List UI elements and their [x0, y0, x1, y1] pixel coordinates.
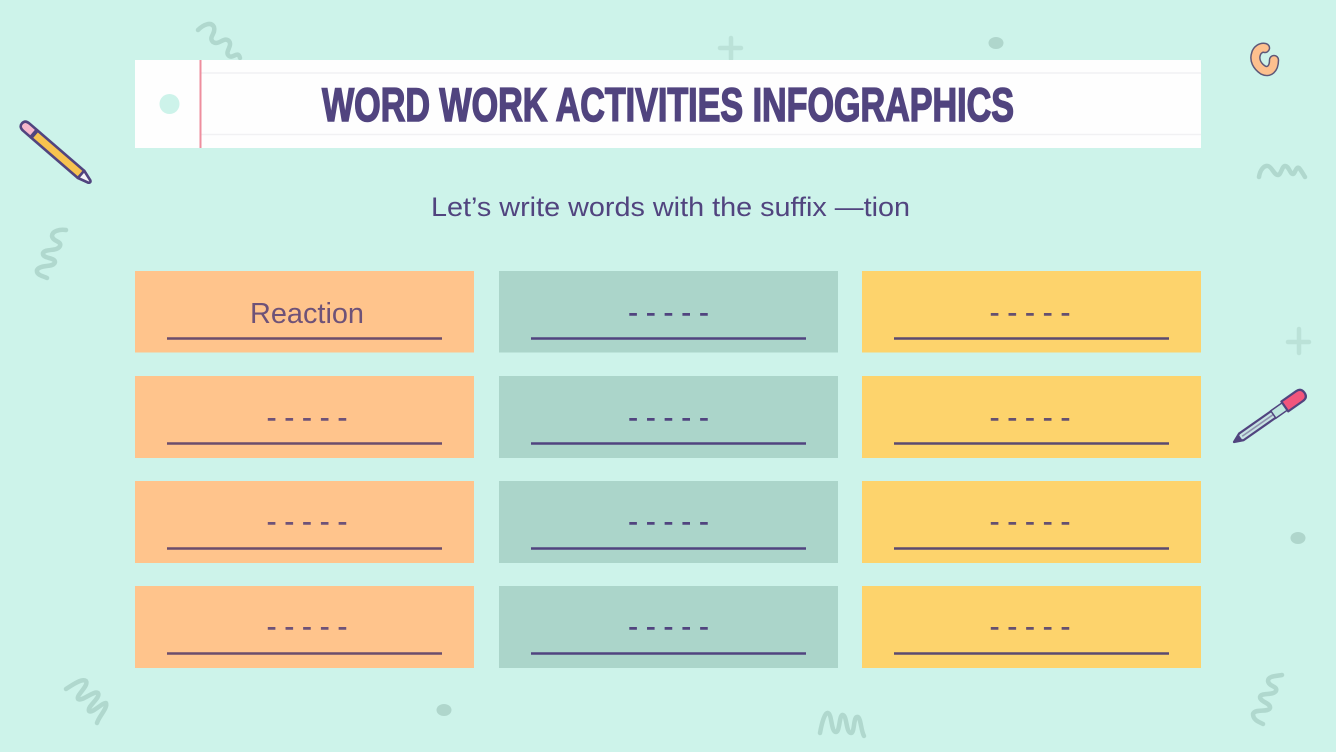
binder hole	[160, 94, 180, 114]
decorative squiggle top left	[198, 24, 240, 58]
decorative squiggle bottom centre	[820, 713, 864, 736]
card: yellow row 2: - - - - -	[990, 402, 1070, 434]
card: orange row 1	[135, 271, 474, 352]
card: yellow row 3	[862, 481, 1201, 563]
title banner	[135, 60, 1201, 148]
card: teal row 3	[499, 481, 838, 563]
card: yellow row 4: - - - - -	[990, 611, 1070, 643]
card: orange row 4: - - - - -	[267, 611, 347, 643]
card: orange row 4	[135, 586, 474, 668]
decorative squiggle top right	[1259, 166, 1305, 177]
card: orange row 3	[135, 481, 474, 563]
card: yellow row 3: - - - - -	[990, 506, 1070, 538]
card: orange row 2	[135, 376, 474, 458]
decorative dot bottom	[436, 704, 452, 716]
icon: macaroni c-shape	[1255, 48, 1274, 71]
card: teal row 2	[499, 376, 838, 458]
card: teal row 2: - - - - -	[628, 402, 709, 434]
card: teal row 3: - - - - -	[628, 506, 709, 538]
decorative plus right	[1288, 329, 1309, 353]
card: orange row 3: - - - - -	[267, 506, 347, 538]
decorative squiggle bottom left	[66, 680, 106, 723]
card: orange row 2: - - - - -	[267, 402, 347, 434]
decorative dot top	[988, 37, 1004, 49]
decorative squiggle left	[37, 230, 66, 278]
icon: pencil	[19, 120, 93, 186]
icon: pen	[1231, 388, 1308, 447]
example word: Reaction	[250, 298, 364, 330]
card: yellow row 4	[862, 586, 1201, 668]
title: WORD WORK ACTIVITIES INFOGRAPHICS	[322, 78, 1014, 131]
card: yellow row 1: - - - - -	[990, 297, 1070, 329]
card: teal row 1: - - - - -	[628, 297, 709, 329]
card: teal row 4	[499, 586, 838, 668]
card: yellow row 2	[862, 376, 1201, 458]
card: teal row 4: - - - - -	[628, 611, 709, 643]
decorative dot right	[1290, 532, 1306, 544]
decorative squiggle bottom right	[1253, 675, 1282, 724]
decorative plus top	[720, 38, 741, 59]
card: teal row 1	[499, 271, 838, 352]
subtitle: Let’s write words with the suffix —tion	[431, 192, 910, 222]
card: yellow row 1	[862, 271, 1201, 352]
